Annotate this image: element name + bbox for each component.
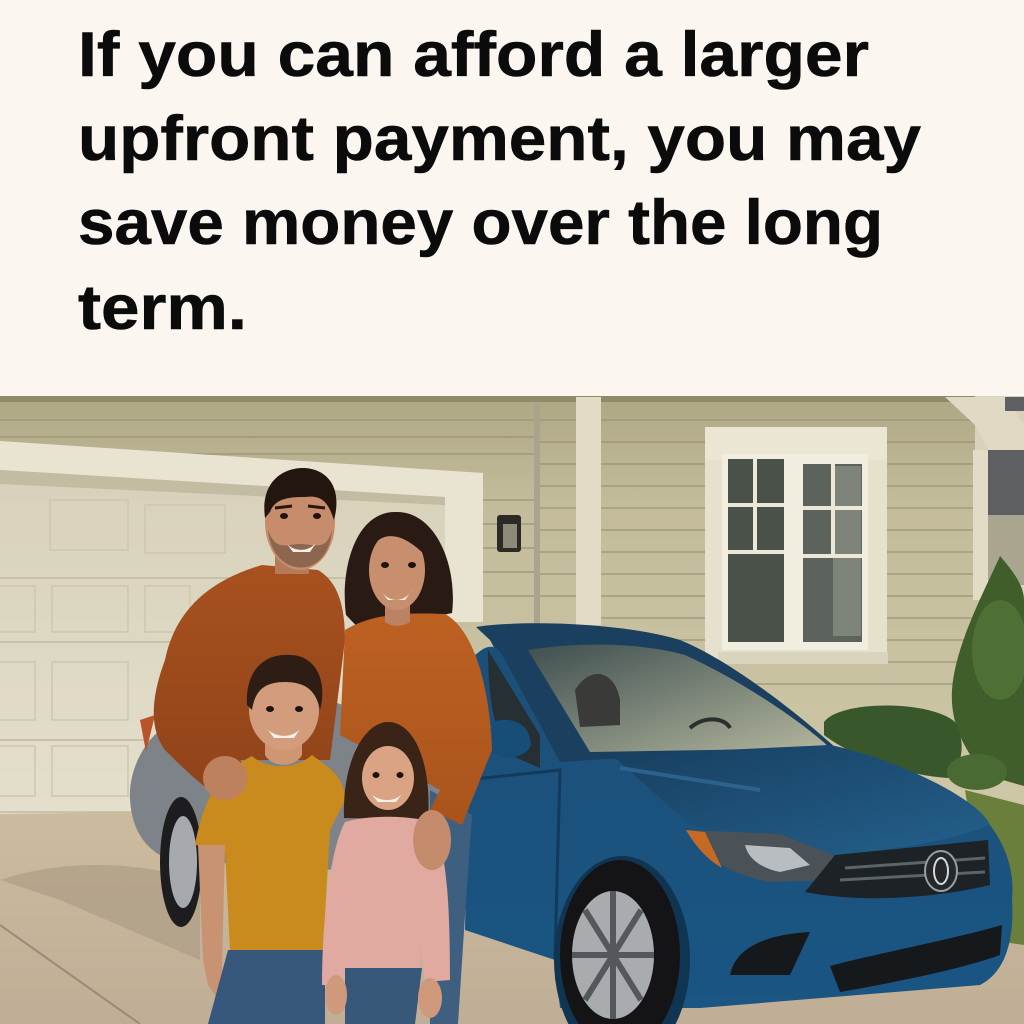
house siding bbox=[0, 396, 1024, 826]
car body bbox=[465, 647, 1013, 1008]
mirror bbox=[492, 720, 531, 757]
window bbox=[705, 427, 888, 664]
title: If you can afford a larger bbox=[78, 20, 869, 90]
wall lamp bbox=[497, 515, 521, 552]
garage door bbox=[0, 441, 483, 814]
grille bbox=[805, 840, 990, 898]
car roof and windows bbox=[476, 623, 838, 770]
mother bbox=[340, 512, 492, 1024]
side window bbox=[488, 650, 540, 768]
title: term. bbox=[78, 273, 247, 343]
door panel line bbox=[466, 770, 560, 958]
shrubs bbox=[824, 556, 1024, 790]
lower grille bbox=[830, 925, 1002, 992]
car rear bbox=[130, 690, 500, 880]
lawn bbox=[965, 790, 1024, 990]
hood bbox=[612, 745, 990, 855]
headlight bbox=[686, 830, 845, 882]
mother's hand on girl's shoulder bbox=[413, 810, 451, 870]
front wheel bbox=[554, 856, 690, 1024]
title bbox=[78, 20, 921, 343]
photo: family with car in front of house bbox=[0, 396, 1024, 1024]
title: save money over the long bbox=[78, 188, 883, 258]
right gable and neighbouring house bbox=[945, 396, 1024, 600]
car bbox=[130, 623, 1013, 1024]
father's hand on boy's shoulder bbox=[203, 756, 247, 800]
driveway bbox=[0, 812, 1024, 1024]
father bbox=[154, 468, 345, 800]
boy bbox=[195, 655, 345, 1024]
girl bbox=[322, 722, 450, 1024]
title: upfront payment, you may bbox=[78, 104, 921, 174]
